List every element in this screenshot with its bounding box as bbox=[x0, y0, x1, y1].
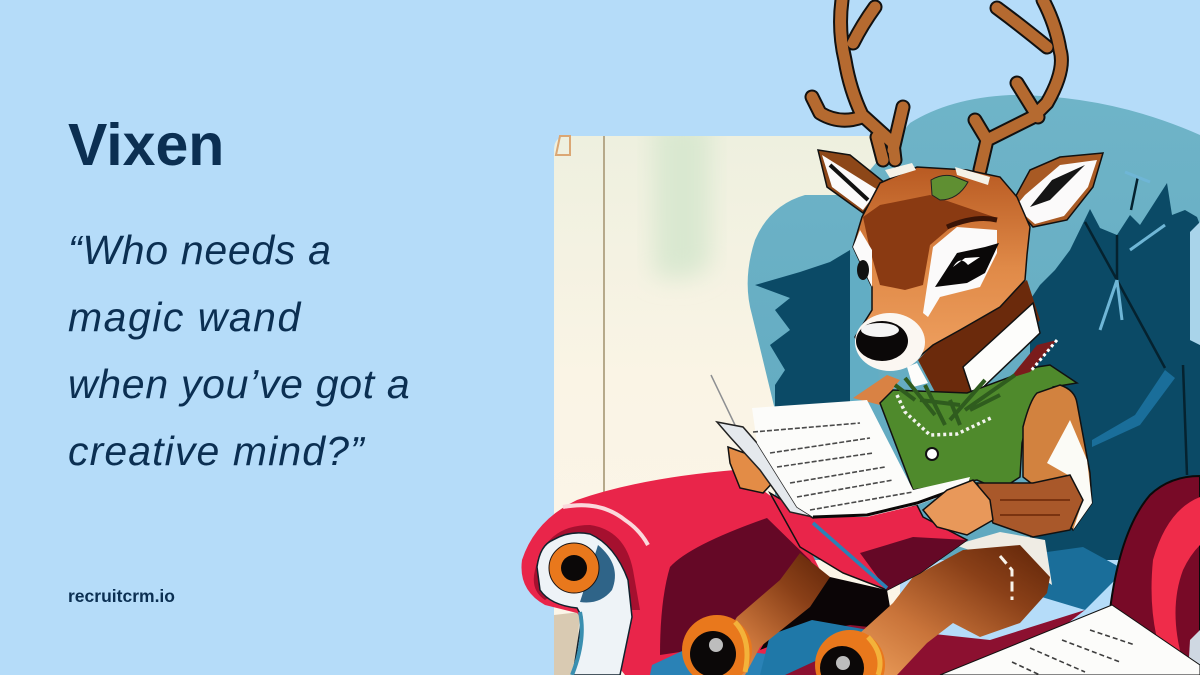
left ear bbox=[818, 150, 885, 213]
deer right hand bbox=[923, 480, 993, 535]
panel: cream wall background bbox=[554, 120, 900, 675]
title: Vixen bbox=[68, 112, 224, 178]
quote text: “Who needs a bbox=[68, 227, 332, 273]
quote text: when you’ve got a bbox=[68, 361, 410, 407]
quote text: magic wand bbox=[68, 294, 302, 340]
armchair back: blue bbox=[748, 95, 1200, 610]
deer legs and hooves bbox=[682, 545, 1050, 675]
armchair scroll: white with orange button bbox=[537, 533, 632, 675]
seat: blue cushion and dark shadow bbox=[650, 577, 1085, 675]
armchair left arm and seat: red bbox=[521, 470, 830, 675]
illustration: reindeer reading in an armchair bbox=[522, 0, 1200, 675]
deer neck and shirt collar bbox=[853, 280, 1040, 405]
right ear bbox=[1012, 153, 1103, 227]
armchair right arm: red bbox=[1110, 476, 1200, 675]
quote text: creative mind?” bbox=[68, 428, 365, 474]
deer head bbox=[818, 150, 1103, 371]
website label: recruitcrm.io bbox=[68, 586, 175, 606]
quote text bbox=[68, 227, 410, 474]
open book pages bbox=[711, 375, 970, 517]
deer body: green vest and arm bbox=[880, 340, 1092, 537]
deer left hand bbox=[728, 447, 775, 493]
loose paper page bbox=[940, 605, 1200, 675]
red open book bbox=[770, 493, 967, 590]
antlers bbox=[812, 0, 1061, 170]
deer belly: white shirt behind the book bbox=[955, 532, 1052, 585]
